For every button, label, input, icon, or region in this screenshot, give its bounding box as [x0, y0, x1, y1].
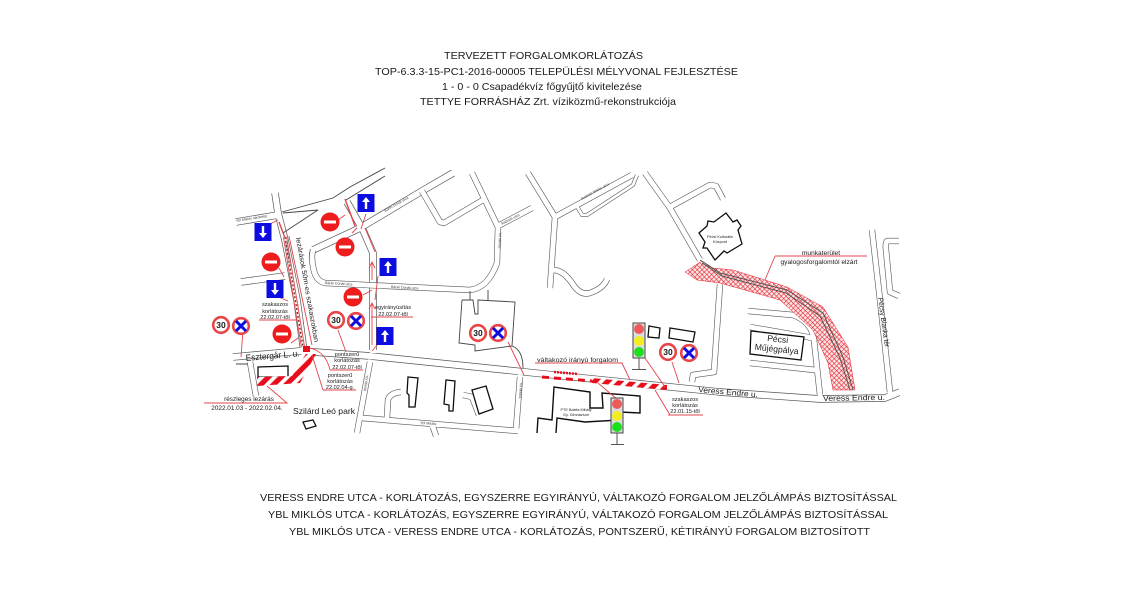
map labels	[211, 182, 892, 426]
map labels: Bánki Donát utca	[325, 281, 352, 286]
signs: speed limit 30 and no stopping	[213, 312, 697, 361]
building: school	[537, 387, 640, 433]
map labels: 22.01.15-től	[670, 409, 700, 415]
map labels: váltakozó irányú forgalom	[537, 357, 619, 364]
traffic light: north	[632, 323, 646, 370]
map labels: 22.02.07-től	[260, 315, 290, 321]
map labels: korlátozás	[327, 379, 353, 385]
map labels: 22.02.04-g.	[326, 385, 355, 391]
map labels: Gy. Gimnázium	[563, 413, 589, 417]
map labels: pontszerű	[335, 352, 359, 358]
map labels: Szilárd Leó park	[293, 406, 356, 416]
map labels: Ybl Miklós	[420, 421, 437, 426]
closure stripes: Veress Endre	[542, 372, 667, 390]
map labels: szakaszos	[262, 302, 288, 308]
title block: TOP-6.3.3-15-PC1-2016-00005 TELEPÜLÉSI MÉLYVONAL FEJLESZTÉSE	[375, 65, 738, 78]
map labels: Veress Endre u.	[823, 393, 885, 403]
title block: 1 - 0 - 0 Csapadékvíz főgyűjtő kivitelezése	[442, 81, 642, 93]
map labels: PTE Babits Mihály	[560, 408, 592, 412]
bottom description: YBL MIKLÓS UTCA - KORLÁTOZÁS, EGYSZERRE EGYIRÁNYÚ, VÁLTAKOZÓ FORGALOM JELZŐLÁMPÁS BIZTOSÍTÁSSAL	[268, 507, 888, 521]
map labels: Központ	[713, 240, 728, 244]
buildings	[258, 213, 804, 433]
map labels: 22.02.07-től	[332, 365, 362, 371]
map labels: Bánki Donát utca	[384, 196, 409, 213]
map labels: szakaszos	[672, 397, 698, 403]
signs: speed limit 30 and no stopping: 30	[473, 328, 483, 338]
red leader lines	[204, 199, 867, 415]
map labels: Bánki Donát utca	[391, 285, 418, 290]
map labels: Ybl Miklós	[497, 232, 502, 249]
map labels: Veress Endre u.	[698, 385, 758, 399]
title block: TETTYE FORRÁSHÁZ Zrt. víziközmű-rekonstrukciója	[420, 95, 676, 108]
closed road section with hatch	[285, 236, 312, 352]
title block	[375, 49, 738, 108]
map labels: részleges lezárás	[224, 396, 274, 403]
map labels: Radnóti utca	[501, 213, 520, 226]
map labels: Ybl Miklós	[363, 375, 369, 392]
map labels: Pécsi Kulturális	[707, 235, 733, 239]
map labels: 2022.01.03 - 2022.02.04.	[211, 405, 283, 412]
building: Pécsi Kulturális Központ	[699, 213, 742, 260]
map labels: Ybl Miklós lakótelep	[236, 214, 268, 223]
closure stripes: Esztergár	[257, 354, 316, 386]
map labels: Műjégpálya	[754, 342, 799, 356]
map labels: Pécsi	[767, 333, 789, 345]
map labels: Radnóti Miklós utca	[581, 182, 610, 201]
map labels: korlátozás	[334, 358, 360, 364]
signs: speed limit 30 and no stopping: 30	[331, 315, 341, 325]
map labels: gyalogosforgalomtól elzárt	[781, 259, 858, 266]
map labels: pontszerű	[328, 373, 352, 379]
map labels: Esztergár L. u.	[245, 348, 300, 363]
road under work area	[700, 260, 853, 390]
hatched work area	[685, 261, 855, 390]
map labels: korlátozás	[672, 403, 698, 409]
bottom description: YBL MIKLÓS UTCA - VERESS ENDRE UTCA - KORLÁTOZÁS, PONTSZERŰ, KÉTIRÁNYÚ FORGALOM BIZTOSÍTOTT	[289, 524, 871, 538]
signs: one-way blue	[254, 194, 396, 345]
building: Pécsi Műjégpálya	[750, 331, 804, 360]
street map: road network	[233, 168, 900, 436]
map labels: egyirányúsítás	[375, 305, 411, 311]
map labels: Esztergár L. u.	[284, 242, 293, 266]
signs: speed limit 30 and no stopping: 30	[663, 347, 673, 357]
map labels: lezárások 50m-es szakaszokban	[294, 237, 319, 343]
title block: TERVEZETT FORGALOMKORLÁTOZÁS	[444, 49, 643, 62]
map labels: Pécsy Blanka tér	[876, 297, 892, 348]
map labels: korlátozás	[262, 309, 288, 315]
traffic light: south	[611, 398, 624, 444]
map labels: munkaterület	[802, 250, 840, 257]
signs: no entry	[262, 212, 362, 344]
bottom description: VERESS ENDRE UTCA - KORLÁTOZÁS, EGYSZERRE EGYIRÁNYÚ, VÁLTAKOZÓ FORGALOM JELZŐLÁMPÁS BIZTOSÍTÁSSAL	[260, 490, 897, 504]
map labels: 22.02.07-től	[378, 312, 408, 318]
map labels: Ybl Miklós	[518, 382, 523, 399]
signs: speed limit 30 and no stopping: 30	[216, 320, 226, 330]
bottom description	[260, 490, 897, 538]
